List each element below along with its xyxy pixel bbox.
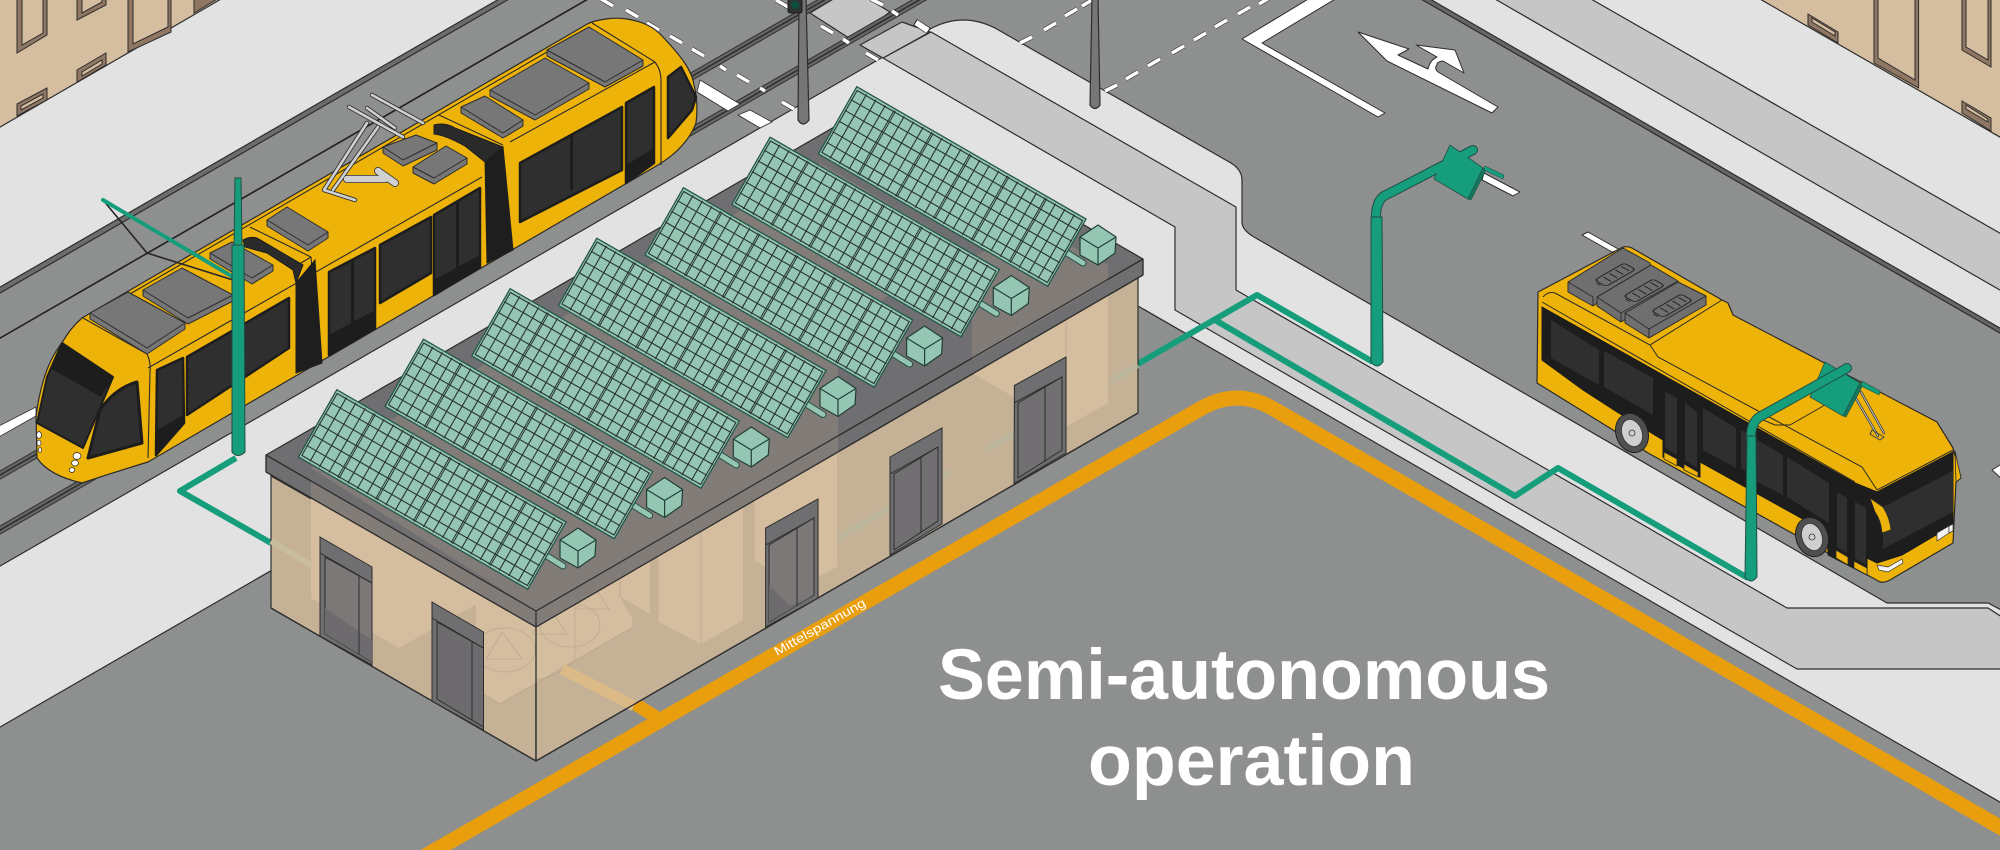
tram windows xyxy=(156,67,696,455)
interior faint outlines and warning signs xyxy=(462,319,1066,704)
bus battery boxes xyxy=(1568,248,1706,338)
solar panel 5 xyxy=(472,289,769,488)
door 1 xyxy=(320,537,372,665)
tram window mullions and door shading xyxy=(156,135,654,455)
street pole xyxy=(1090,0,1100,108)
tram headlights xyxy=(36,432,81,472)
title: operation xyxy=(1088,722,1415,801)
solar panel 4 xyxy=(558,238,856,438)
door 2 xyxy=(432,602,484,730)
solar panel 6 xyxy=(385,339,683,539)
tram roof equipment boxes xyxy=(90,27,643,354)
bus lights xyxy=(1877,524,1953,572)
bus body xyxy=(1537,247,1961,582)
orange medium-voltage cable xyxy=(420,398,2000,850)
bus charging arm xyxy=(1855,392,1884,440)
teal cable: bus and lamp feeders xyxy=(1136,295,1748,578)
bus roof lines xyxy=(1542,292,1953,490)
transparent interior: cabinets xyxy=(311,295,1108,704)
cable label: Mittelspannung xyxy=(772,596,868,659)
tram body xyxy=(36,18,697,483)
road markings: tram stop lines xyxy=(0,80,772,438)
bus windows xyxy=(1551,320,1953,565)
grey cycle path band xyxy=(883,32,2000,669)
roof edges xyxy=(266,259,1143,627)
solar panel 7 xyxy=(298,390,596,589)
bus stop charging pole xyxy=(1745,362,1880,581)
tram crossing patches xyxy=(810,0,930,58)
tram roof and side lines xyxy=(83,23,661,458)
building outer edges xyxy=(271,413,1138,761)
bus wheels xyxy=(1610,409,1834,561)
traffic light pole xyxy=(788,0,809,124)
building xyxy=(266,87,1143,761)
tram windscreen xyxy=(37,343,113,448)
tram xyxy=(36,18,697,483)
top-left sidewalk and building xyxy=(0,0,516,296)
tram gangways xyxy=(296,147,513,373)
road markings: dashed lines xyxy=(601,0,1271,109)
solar panel 3 xyxy=(645,188,943,387)
bus door steps xyxy=(1664,452,1867,575)
title: Semi-autonomous xyxy=(938,636,1550,715)
solar panel 1 xyxy=(818,87,1116,286)
tram gangway hoods xyxy=(243,124,503,283)
bus window belt xyxy=(1542,307,1953,575)
bus xyxy=(1537,247,1961,582)
solar panel 2 xyxy=(732,137,1029,337)
title xyxy=(938,636,1550,801)
door 3 xyxy=(766,499,818,627)
road markings: lane border and turn arrow xyxy=(1242,0,2000,480)
roof slab xyxy=(266,455,536,627)
door 5 xyxy=(1014,357,1066,484)
interior cables seen through the wall xyxy=(271,365,1138,706)
tram pantograph xyxy=(324,95,423,200)
battery icons xyxy=(1593,263,1692,318)
top-right road curb, sidewalk, path and building xyxy=(1414,0,2000,336)
bus mirrors xyxy=(1870,451,1961,533)
overhead wire and tram tracks xyxy=(0,0,933,533)
door 4 xyxy=(890,428,942,555)
building walls xyxy=(271,476,536,761)
catenary pole with wire and arm xyxy=(103,178,245,456)
teal cable: tram feeder xyxy=(180,458,271,543)
street lamp with charging head xyxy=(1371,145,1504,366)
roof translucent lighter areas xyxy=(311,163,1108,627)
